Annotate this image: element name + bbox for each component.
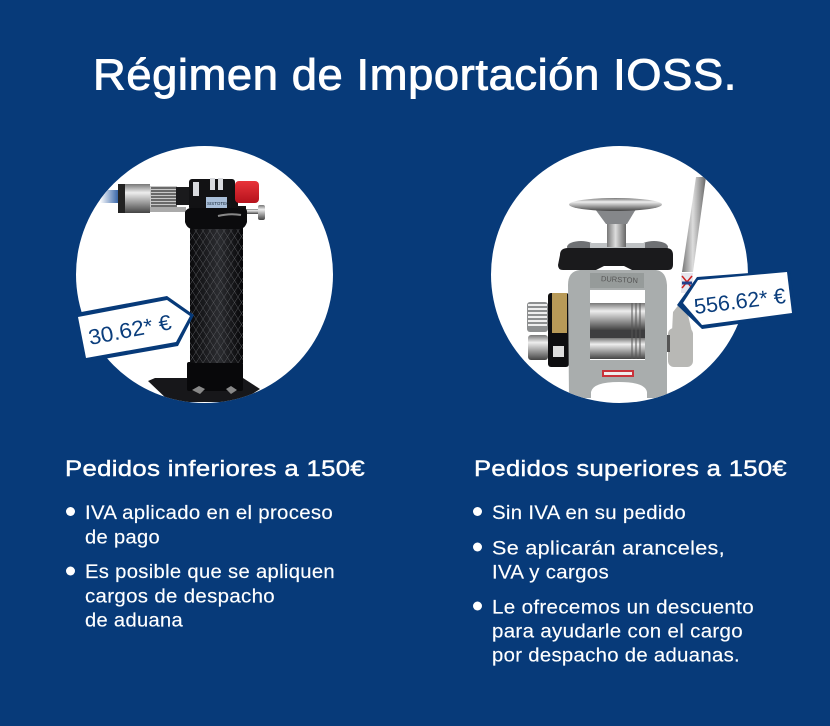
product circle: torch [76, 146, 333, 403]
list: de pago [85, 528, 160, 548]
list: IVA y cargos [492, 562, 609, 584]
list: cargos de despacho [85, 586, 275, 608]
panel: pedidos inferiores [65, 146, 365, 632]
price tag: 556.62 [677, 270, 796, 329]
list: Le ofrecemos un descuento [492, 598, 754, 618]
heading: Pedidos inferiores a 150€ [65, 456, 365, 481]
list: para ayudarle con el cargo [492, 622, 743, 642]
heading: Pedidos superiores a 150€ [474, 456, 787, 481]
list: de aduana [85, 610, 183, 632]
panel: pedidos superiores [473, 146, 796, 666]
list: Se aplicarán aranceles, [492, 538, 725, 560]
list: Sin IVA en su pedido [492, 503, 686, 524]
icon: blowtorch [100, 178, 265, 402]
list [473, 503, 754, 666]
price tag: 30.62 [76, 296, 194, 362]
icon: rolling mill [527, 177, 706, 398]
icon: blowtorch: SISTOTEC [207, 201, 230, 206]
title: Régimen de Importación IOSS. [93, 50, 737, 100]
price tag: 556.62: 556.62* € [693, 284, 787, 319]
list: Es posible que se apliquen [85, 562, 335, 583]
icon: rolling mill: DURSTON [601, 274, 638, 285]
list [66, 503, 335, 632]
price tag: 30.62: 30.62* € [86, 310, 173, 350]
list: por despacho de aduanas. [492, 646, 740, 666]
list: IVA aplicado en el proceso [85, 503, 333, 524]
product circle: rolling mill [491, 146, 796, 403]
